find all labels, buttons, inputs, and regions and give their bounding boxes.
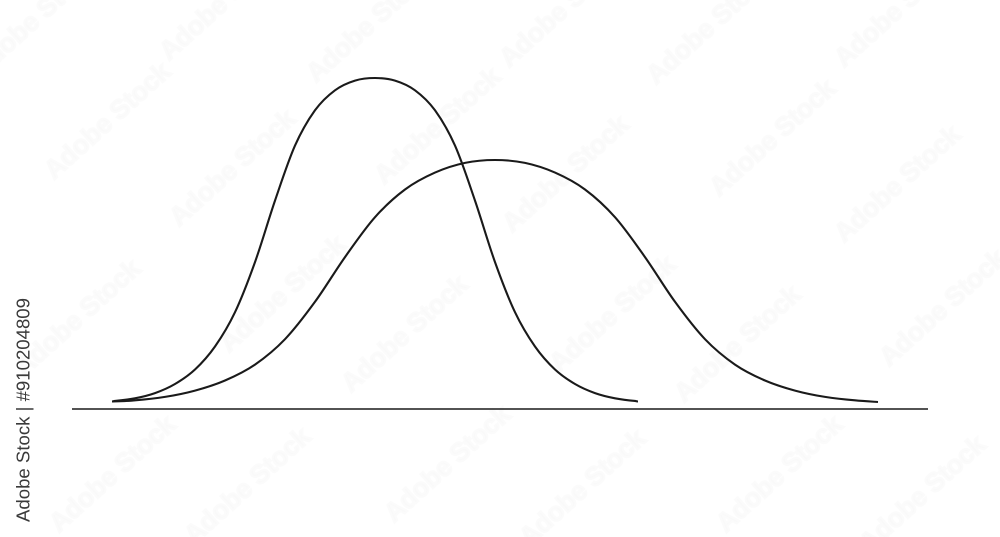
stock id caption: Adobe Stock | #910204809: [14, 298, 34, 522]
narrow bell curve: [112, 78, 638, 402]
watermark pattern: Adobe Stock: [543, 249, 681, 378]
watermark pattern: Adobe Stock: [703, 73, 841, 202]
wide bell curve: [112, 160, 878, 402]
watermark pattern: Adobe Stock: [335, 269, 473, 398]
watermark pattern: Adobe Stock: [38, 56, 176, 185]
watermark pattern: Adobe Stock: [668, 279, 806, 408]
watermark pattern: Adobe Stock: [710, 409, 848, 537]
watermark pattern: Adobe Stock: [163, 103, 301, 232]
watermark pattern: Adobe Stock: [378, 399, 516, 528]
watermark pattern: Adobe Stock: [213, 229, 351, 358]
watermark pattern: Adobe Stock: [8, 253, 146, 382]
baseline axis: [72, 408, 928, 410]
watermark pattern: Adobe Stock: [828, 119, 966, 248]
watermark pattern: Adobe Stock: [368, 61, 506, 190]
watermark pattern: Adobe Stock: [496, 109, 634, 238]
watermark pattern: Adobe Stock: [43, 409, 181, 537]
